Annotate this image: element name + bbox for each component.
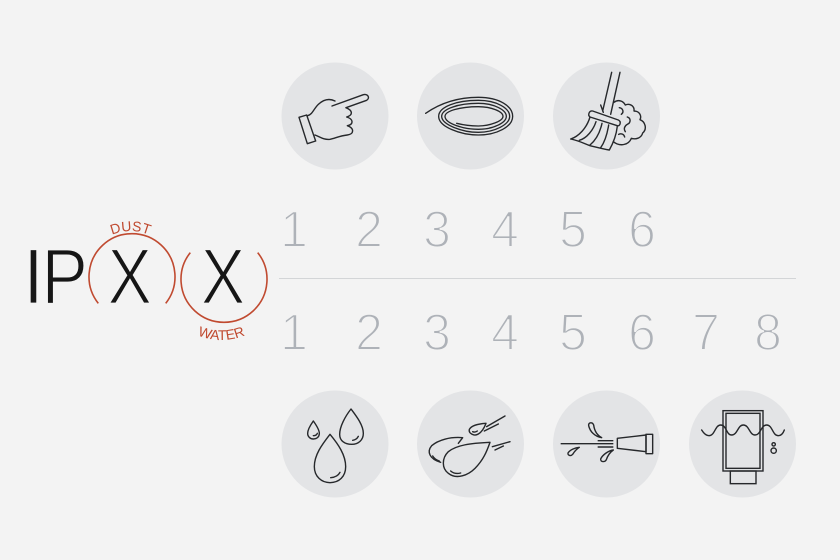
water rating numbers <box>280 303 782 361</box>
icon: dripping water drops <box>282 390 388 498</box>
label: water: WATER <box>200 326 245 340</box>
logo: IP X X: I <box>22 232 44 320</box>
dust arc <box>89 234 175 303</box>
water rating numbers: 6 <box>628 303 656 361</box>
icon: spraying water <box>417 390 524 498</box>
icon: pointing hand <box>282 62 388 170</box>
icon: immersed device <box>689 390 796 498</box>
dust rating numbers: 3 <box>423 200 451 258</box>
dust rating numbers: 2 <box>355 200 383 258</box>
icon: coiled cable <box>417 62 524 170</box>
icon: broom and dust <box>553 62 660 170</box>
logo: IP X X <box>22 221 268 340</box>
logo: IP X X: X <box>108 233 152 321</box>
divider line <box>279 278 796 279</box>
water arc <box>181 253 267 322</box>
water rating numbers: 8 <box>754 303 782 361</box>
water rating numbers: 3 <box>423 303 451 361</box>
dust rating numbers: 5 <box>559 200 587 258</box>
dust rating numbers: 1 <box>280 200 308 258</box>
water rating numbers: 7 <box>692 303 720 361</box>
logo: IP X X: P <box>42 232 88 320</box>
water rating numbers: 2 <box>355 303 383 361</box>
dust rating numbers <box>280 200 656 258</box>
dust rating numbers: 4 <box>491 200 519 258</box>
logo: IP X X: X <box>201 233 245 321</box>
dust rating numbers: 6 <box>628 200 656 258</box>
water rating numbers: 4 <box>491 303 519 361</box>
icon: water jet nozzle <box>553 390 660 498</box>
water rating numbers: 1 <box>280 303 308 361</box>
water rating numbers: 5 <box>559 303 587 361</box>
label: dust: DUST <box>110 221 152 234</box>
